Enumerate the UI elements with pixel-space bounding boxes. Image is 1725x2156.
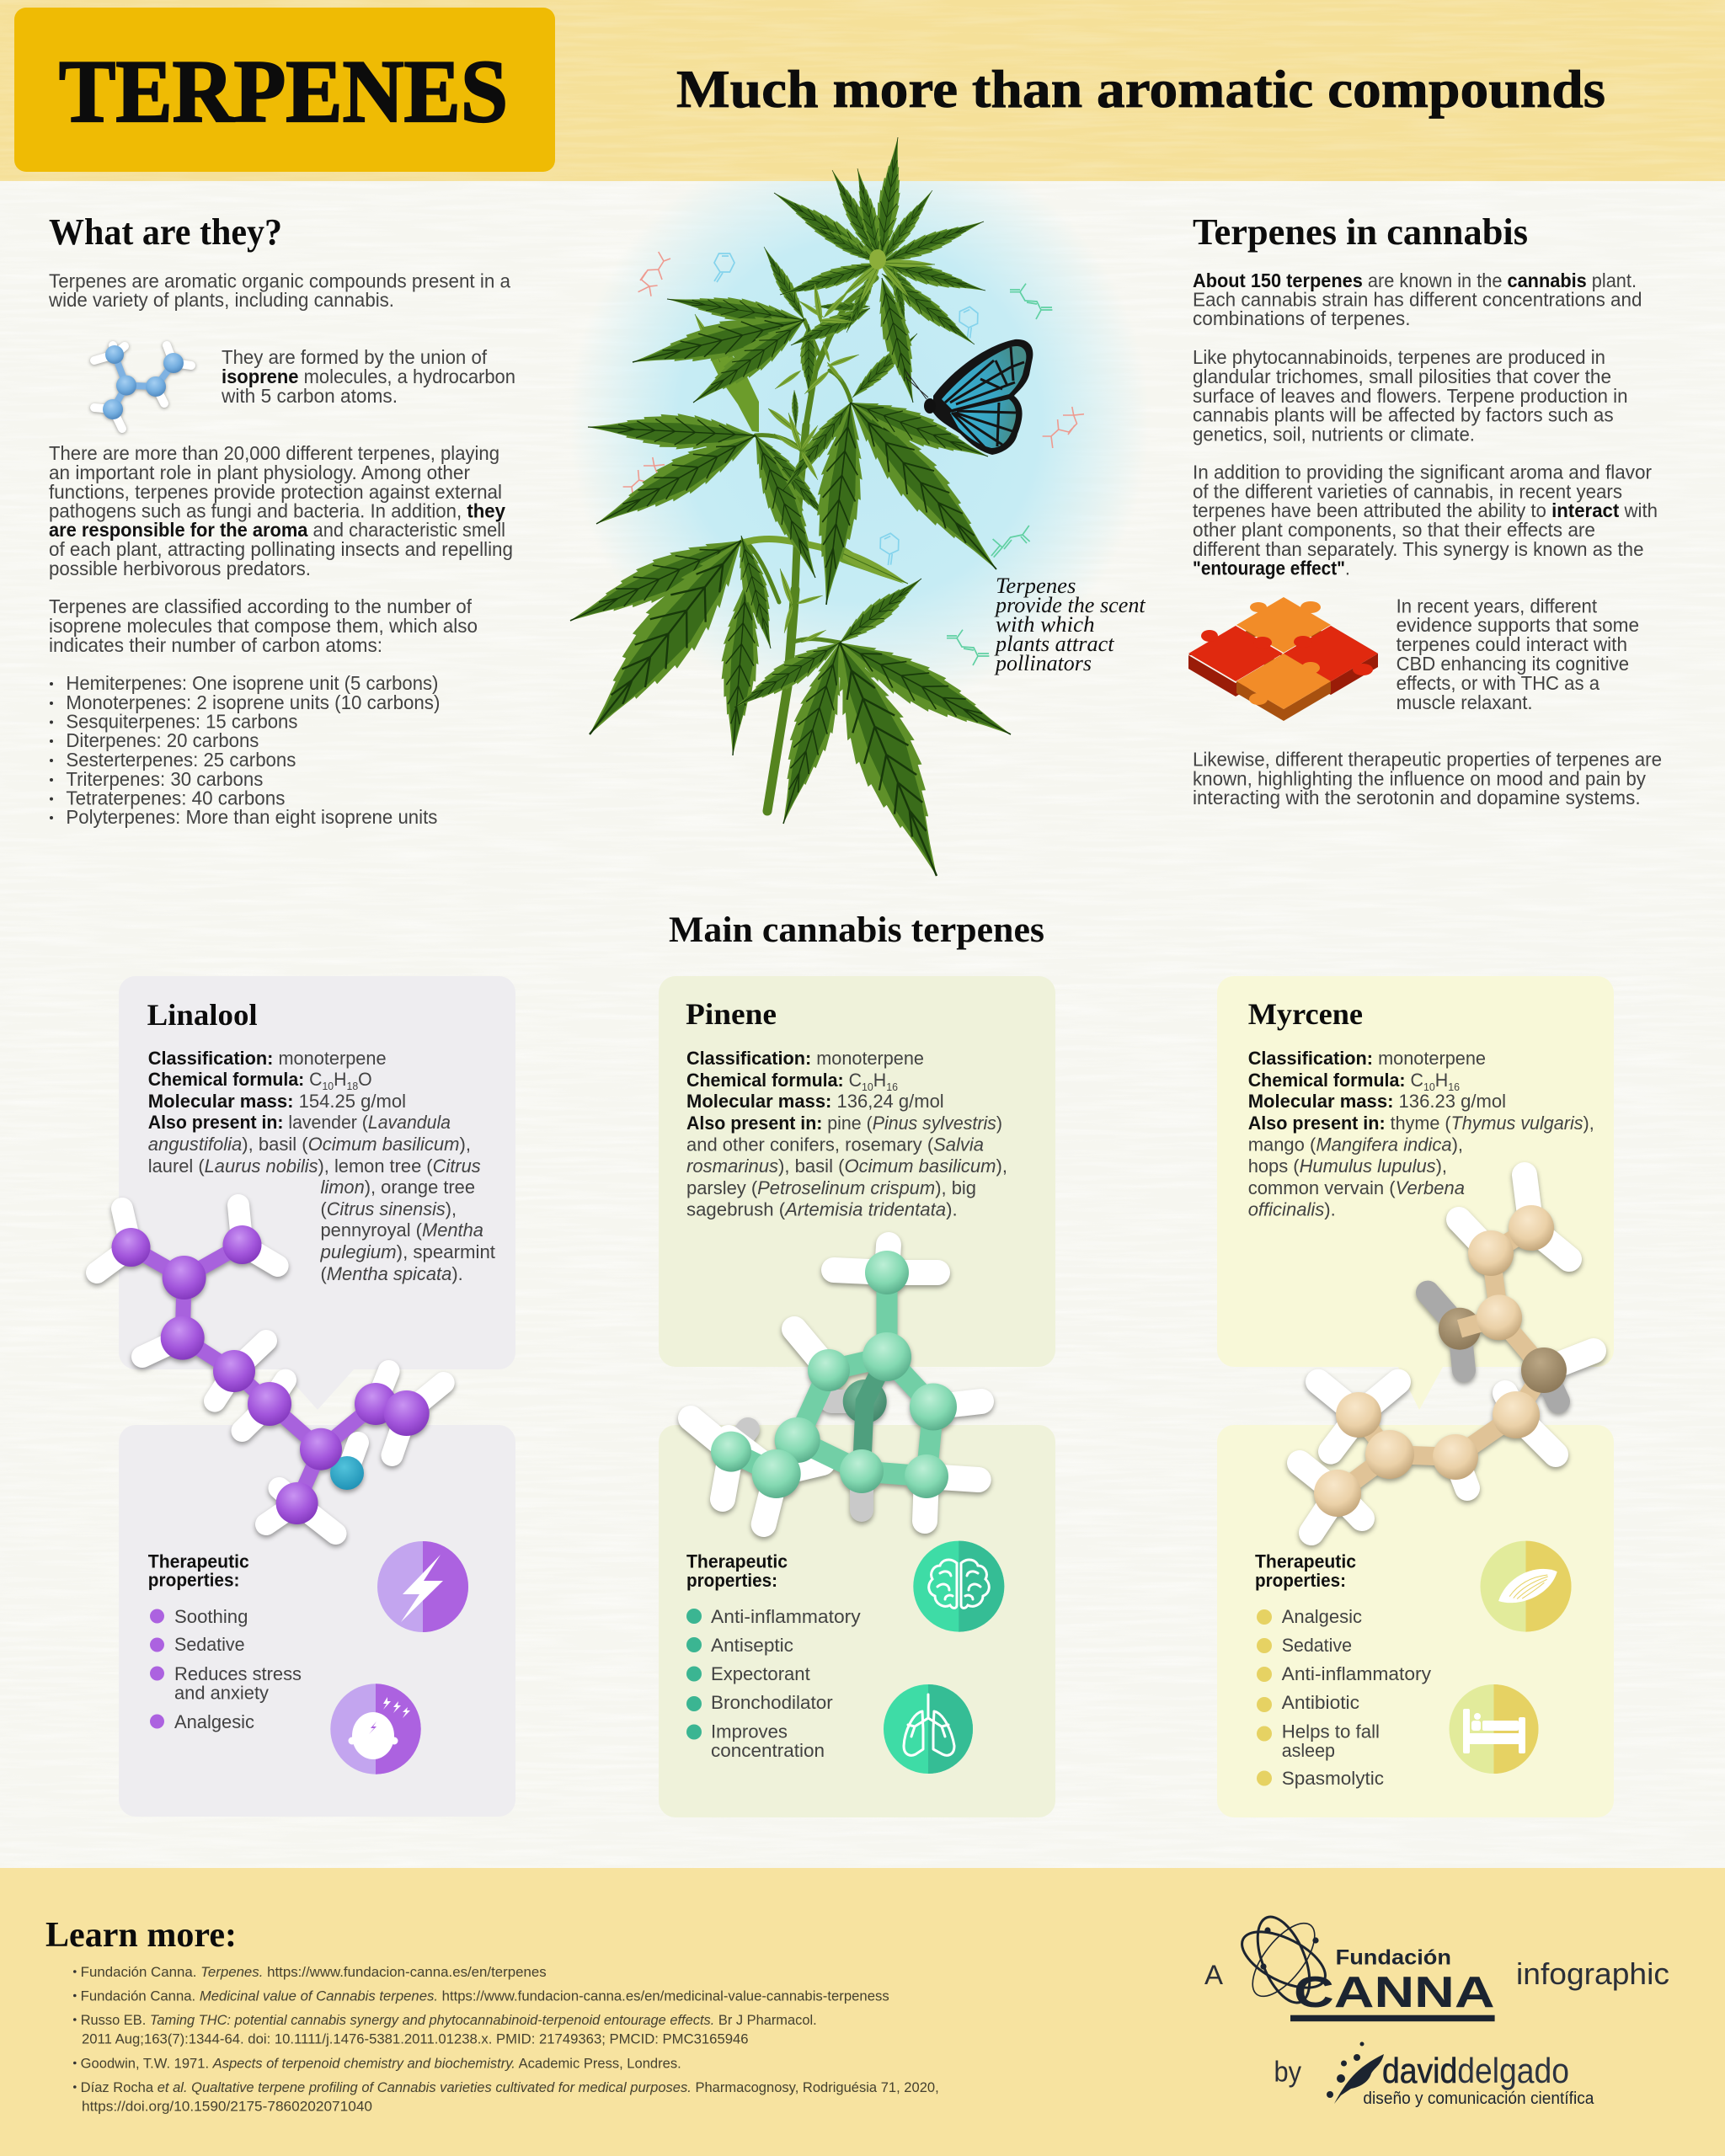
list: myrcene properties: Helps to fall <box>1282 1721 1380 1742</box>
subheading: therapeutic properties <box>1255 1551 1356 1591</box>
subheading: therapeutic properties <box>148 1550 249 1591</box>
bullet list: terpene classes: Triterpenes: 30 carbons <box>66 768 263 790</box>
logo: A Fundación Canna infographic: infographic <box>1516 1956 1669 1991</box>
paragraph: trichomes: cannabis plants will be affected by factors such as <box>1193 404 1614 426</box>
logo: by David Delgado: by <box>1274 2057 1301 2089</box>
leaf: bottom large <box>728 570 1021 888</box>
paragraph: therapeutic properties <box>1193 748 1662 808</box>
isoprene text: isoprene molecules, a hydrocarbon <box>222 366 515 387</box>
paragraph: classification: indicates their number of carbon atoms: <box>49 634 382 656</box>
footer band <box>0 1868 1725 2156</box>
icon: puzzle <box>1188 597 1378 721</box>
caption: pollinators: provide the scent <box>994 593 1146 617</box>
panel: myrcene <box>1217 976 1614 1817</box>
bullet list: terpene classes: Hemiterpenes: One isoprene unit (5 carbons) <box>66 672 438 694</box>
reference list: Goodwin, T.W. 1971. Aspects of terpenoid chemistry and biochemistry. Academic Press, Londres. <box>81 2057 681 2072</box>
card backgrounds <box>119 976 515 1817</box>
molecule: linalool <box>97 1205 444 1534</box>
facts: linalool: (Citrus sinensis), <box>320 1198 457 1219</box>
facts: myrcene: 10 <box>1423 1081 1435 1093</box>
reference list: https://doi.org/10.1590/2175-7860202071040 <box>82 2100 372 2115</box>
paragraph: therapeutic properties: Likewise, different therapeutic properties of terpenes are <box>1193 748 1662 770</box>
logo: by David Delgado: daviddelgado <box>1382 2051 1569 2090</box>
list: myrcene properties: asleep <box>1282 1740 1335 1761</box>
header band texture <box>0 0 1725 181</box>
list: myrcene properties <box>1257 1606 1432 1789</box>
logo: by David Delgado: diseño y comunicación científica <box>1363 2089 1594 2108</box>
caption: pollinators <box>994 574 1146 675</box>
icon: lightning <box>377 1541 468 1632</box>
facts: pinene <box>686 1048 1007 1219</box>
paragraph: role <box>49 442 513 579</box>
logo: A Fundación Canna infographic: Fundación <box>1336 1946 1451 1970</box>
flower buds <box>773 281 860 644</box>
card backgrounds <box>1217 976 1614 1817</box>
reference list: Russo EB. Taming THC: potential cannabis synergy and phytocannabinoid-terpenoid entourage effects. Br J Pharmacol. <box>81 2013 817 2028</box>
paragraph: role: pathogens such as fungi and bacteria. In addition, they <box>49 500 505 522</box>
facts: myrcene: H <box>1435 1070 1448 1091</box>
paragraph: about 150 terpenes: Each cannabis strain has different concentrations and <box>1193 288 1642 310</box>
paragraph: entourage effect <box>1193 462 1658 579</box>
heading: pinene: Pinene <box>686 997 777 1031</box>
paragraph: entourage effect: "entourage effect". <box>1193 558 1350 579</box>
subheading: therapeutic properties: Therapeutic <box>148 1550 249 1572</box>
paragraph: role: possible herbivorous predators. <box>49 558 311 579</box>
reference list: Fundación Canna. Terpenes. https://www.fundacion-canna.es/en/terpenes <box>81 1965 547 1980</box>
icon: quill <box>1327 2041 1384 2104</box>
paragraph: entourage effect: In addition to providing the significant aroma and flavor <box>1193 462 1652 483</box>
heading: learn more: Learn more: <box>45 1916 237 1955</box>
list: pinene properties: Antiseptic <box>711 1635 793 1656</box>
panel: what are they <box>48 211 515 828</box>
list: pinene properties: Anti-inflammatory <box>711 1606 861 1627</box>
intro paragraph: wide variety of plants, including cannabis. <box>48 289 394 311</box>
facts: pinene: 10 <box>862 1081 873 1093</box>
list: linalool properties: Soothing <box>174 1606 248 1627</box>
heading: terpenes in cannabis: Terpenes in cannabis <box>1193 211 1528 253</box>
paragraph: about 150 terpenes: combinations of terpenes. <box>1193 307 1410 329</box>
title box <box>14 8 555 172</box>
list: pinene properties <box>686 1606 861 1761</box>
subtitle: Much more than aromatic compounds <box>676 60 1605 119</box>
paragraph: recent evidence <box>1397 595 1639 713</box>
facts: linalool: limon), orange tree <box>320 1177 475 1198</box>
molecule: myrcene <box>1300 1175 1594 1533</box>
facts: linalool: pennyroyal (Mentha <box>320 1219 483 1241</box>
facts: myrcene: Classification: monoterpene <box>1248 1048 1486 1069</box>
heading: what are they: What are they? <box>49 211 282 253</box>
list: pinene properties: Bronchodilator <box>711 1692 833 1713</box>
header band <box>0 0 1725 181</box>
facts: pinene: and other conifers, rosemary (Salvia <box>686 1134 984 1155</box>
paragraph: entourage effect: other plant components, so that their effects are <box>1193 519 1595 541</box>
leaf: upper left <box>628 243 874 438</box>
illustration: cannabis plant <box>562 136 1021 888</box>
heading: linalool: Linalool <box>147 998 258 1032</box>
list: pinene properties: Expectorant <box>711 1663 810 1684</box>
facts: pinene: sagebrush (Artemisia tridentata). <box>686 1199 958 1219</box>
subheading: therapeutic properties: properties: <box>686 1570 777 1591</box>
paragraph: recent evidence: In recent years, different <box>1397 595 1598 616</box>
caption: pollinators: Terpenes <box>996 574 1076 598</box>
caption: pollinators: pollinators <box>994 651 1092 675</box>
facts: myrcene: Also present in: thyme (Thymus vulgaris), <box>1248 1113 1594 1134</box>
facts: linalool: Chemical formula: C <box>148 1069 323 1090</box>
facts: pinene: 16 <box>886 1081 898 1093</box>
icon: lungs <box>884 1684 973 1774</box>
facts: linalool: O <box>358 1069 372 1090</box>
paragraph: about 150 terpenes: About 150 terpenes are known in the cannabis plant. <box>1193 270 1637 291</box>
facts: pinene: Also present in: pine (Pinus sylvestris) <box>686 1113 1002 1134</box>
facts: linalool: Classification: monoterpene <box>148 1048 387 1069</box>
leaf: lower left big <box>562 522 911 757</box>
paragraph: recent evidence: CBD enhancing its cognitive <box>1397 653 1629 675</box>
list: linalool properties: Sedative <box>174 1634 245 1655</box>
facts: myrcene <box>1248 1048 1594 1219</box>
card backgrounds <box>659 976 1055 1817</box>
plant stems <box>741 278 876 811</box>
isoprene text <box>221 346 515 407</box>
paragraph: entourage effect: of the different varieties of cannabis, in recent years <box>1193 480 1622 502</box>
paragraph: role: an important role in plant physiology. Among other <box>49 462 470 483</box>
list: myrcene properties: Anti-inflammatory <box>1282 1663 1432 1684</box>
main title: TERPENES <box>59 42 508 141</box>
paragraph: about 150 terpenes <box>1193 270 1642 329</box>
logo: A Fundación Canna infographic: A <box>1204 1960 1224 1990</box>
list: linalool properties <box>150 1606 302 1732</box>
isoprene text: with 5 carbon atoms. <box>221 385 398 407</box>
light petiole wing <box>711 354 759 432</box>
facts: myrcene: officinalis). <box>1248 1199 1336 1219</box>
icon: bed <box>1449 1684 1538 1774</box>
panel: terpenes in cannabis <box>1188 211 1662 808</box>
facts: myrcene: 16 <box>1448 1081 1460 1093</box>
paragraph: role: of each plant, attracting pollinating insects and repelling <box>49 538 513 560</box>
facts: linalool: (Mentha spicata). <box>320 1263 463 1284</box>
facts: linalool: angustifolia), basil (Ocimum basilicum), <box>148 1134 471 1155</box>
facts: pinene: Classification: monoterpene <box>686 1048 924 1069</box>
subheading: therapeutic properties: properties: <box>148 1570 239 1591</box>
list: myrcene properties: Spasmolytic <box>1282 1768 1384 1789</box>
list: pinene properties: concentration <box>711 1740 825 1761</box>
paragraph: classification: isoprene molecules that compose them, which also <box>49 615 478 637</box>
paragraph: trichomes: glandular trichomes, small pilosities that cover the <box>1193 366 1611 387</box>
bullet list: terpene classes: Monoterpenes: 2 isoprene units (10 carbons) <box>66 691 440 713</box>
list: linalool properties: Analgesic <box>174 1711 254 1732</box>
illustration: butterfly <box>905 339 1033 455</box>
heading: myrcene: Myrcene <box>1248 997 1363 1031</box>
bullet list: terpene classes: Sesterterpenes: 25 carbons <box>66 749 296 771</box>
reference list: 2011 Aug;163(7):1344-64. doi: 10.1111/j.1476-5381.2011.01238.x. PMID: 21749363; PMCID: PMC3165946 <box>82 2032 749 2047</box>
facts: pinene: rosmarinus), basil (Ocimum basilicum), <box>686 1155 1007 1177</box>
logo: by David Delgado <box>1274 2041 1594 2108</box>
panel: learn more <box>45 1916 939 2115</box>
paragraph: recent evidence: evidence supports that some <box>1397 614 1639 636</box>
subheading: therapeutic properties: properties: <box>1255 1570 1346 1591</box>
small chemical structures around the plant <box>623 252 1084 665</box>
subheading: therapeutic properties: Therapeutic <box>1255 1551 1356 1572</box>
panel: pinene <box>659 976 1055 1817</box>
facts: pinene: parsley (Petroselinum crispum), big <box>686 1177 976 1198</box>
subheading: therapeutic properties <box>686 1551 788 1591</box>
bullet list: terpene classes: Polyterpenes: More than eight isoprene units <box>66 806 437 828</box>
facts: linalool: 10 <box>322 1080 334 1092</box>
paragraph: therapeutic properties: known, highlighting the influence on mood and pain by <box>1193 767 1646 789</box>
isoprene text: They are formed by the union of <box>222 346 488 368</box>
facts: myrcene: mango (Mangifera indica), <box>1248 1134 1463 1155</box>
leaf: right middle <box>776 328 1014 607</box>
paragraph: trichomes: Like phytocannabinoids, terpenes are produced in <box>1193 346 1605 368</box>
molecule: pinene <box>691 1245 981 1524</box>
paragraph: entourage effect: terpenes have been attributed the ability to interact with <box>1193 499 1658 521</box>
paragraph: trichomes <box>1193 346 1627 445</box>
bullet list: terpene classes: Tetraterpenes: 40 carbons <box>66 787 285 809</box>
caption: pollinators: plants attract <box>994 632 1114 656</box>
paragraph: role: are responsible for the aroma and characteristic smell <box>49 519 505 541</box>
reference list: Fundación Canna. Medicinal value of Cannabis terpenes. https://www.fundacion-canna.es/en/medicinal-value-cannabis-terpeness <box>81 1989 889 2004</box>
facts: myrcene: common vervain (Verbena <box>1248 1177 1465 1198</box>
list: pinene properties: Improves <box>711 1721 788 1742</box>
paragraph: trichomes: genetics, soil, nutrients or climate. <box>1193 423 1475 445</box>
intro paragraph: Terpenes are aromatic organic compounds present in a <box>49 270 510 291</box>
facts: pinene: Molecular mass: 136,24 g/mol <box>686 1091 944 1112</box>
panel: linalool <box>97 976 515 1817</box>
paragraph: therapeutic properties: interacting with the serotonin and dopamine systems. <box>1193 787 1641 808</box>
facts: myrcene: Chemical formula: C <box>1248 1070 1424 1091</box>
logo: A Fundación Canna infographic <box>1204 1910 1669 2021</box>
icon: atom <box>1234 1910 1333 2009</box>
list: linalool properties: and anxiety <box>174 1683 270 1704</box>
list: myrcene properties: Analgesic <box>1282 1606 1362 1627</box>
paragraph: recent evidence: effects, or with THC as a <box>1397 672 1599 694</box>
bullet list: terpene classes: Sesquiterpenes: 15 carbons <box>66 711 297 733</box>
facts: linalool: laurel (Laurus nobilis), lemon tree (Citrus <box>148 1155 481 1177</box>
intro paragraph <box>48 270 510 311</box>
facts: linalool: Molecular mass: 154.25 g/mol <box>148 1091 406 1112</box>
heading: main cannabis terpenes: Main cannabis terpenes <box>669 910 1044 950</box>
facts: myrcene: Molecular mass: 136.23 g/mol <box>1248 1091 1506 1112</box>
facts: myrcene: hops (Humulus lupulus), <box>1248 1155 1447 1177</box>
paragraph: role: functions, terpenes provide protection against external <box>49 481 502 503</box>
icon: isoprene molecule <box>94 345 191 429</box>
reference list <box>73 1965 939 2115</box>
paragraph: classification: Terpenes are classified according to the number of <box>49 595 473 617</box>
list: myrcene properties: Antibiotic <box>1282 1692 1359 1713</box>
facts: pinene: H <box>873 1070 886 1091</box>
bullet list: terpene classes: Diterpenes: 20 carbons <box>66 729 259 751</box>
leaf: middle left <box>587 409 837 584</box>
facts: linalool: 18 <box>346 1080 358 1092</box>
facts: linalool: Also present in: lavender (Lavandula <box>148 1112 451 1133</box>
leaf: top cluster <box>768 136 988 406</box>
blue glow behind plant <box>569 131 1150 712</box>
reference list: Díaz Rocha et al. Qualtative terpene profiling of Cannabis varieties cultivated for medical purposes. Pharmacognosy, Rodriguésia 71, 2020, <box>81 2080 939 2095</box>
paragraph: trichomes: surface of leaves and flowers. Terpene production in <box>1193 385 1627 407</box>
paragraph: recent evidence: muscle relaxant. <box>1397 691 1533 713</box>
bullet list: terpene classes <box>50 672 440 828</box>
paragraph: recent evidence: terpenes could interact with <box>1397 633 1627 655</box>
icon: headache <box>330 1684 421 1774</box>
icon: muscle <box>1481 1541 1572 1632</box>
facts: pinene: Chemical formula: C <box>686 1070 862 1091</box>
paragraph: classification <box>49 595 478 656</box>
subheading: therapeutic properties: Therapeutic <box>686 1551 788 1572</box>
caption: pollinators: with which <box>996 612 1095 637</box>
paragraph: role: There are more than 20,000 different terpenes, playing <box>49 442 499 464</box>
facts: linalool <box>148 1048 496 1284</box>
facts: linalool: H <box>334 1069 346 1090</box>
icon: brain <box>913 1541 1004 1632</box>
paragraph: entourage effect: different than separately. This synergy is known as the <box>1193 538 1644 560</box>
list: myrcene properties: Sedative <box>1282 1635 1352 1656</box>
facts: linalool: pulegium), spearmint <box>320 1241 496 1262</box>
list: linalool properties: Reduces stress <box>174 1663 302 1684</box>
logo: A Fundación Canna infographic: CANNA <box>1294 1968 1495 2017</box>
